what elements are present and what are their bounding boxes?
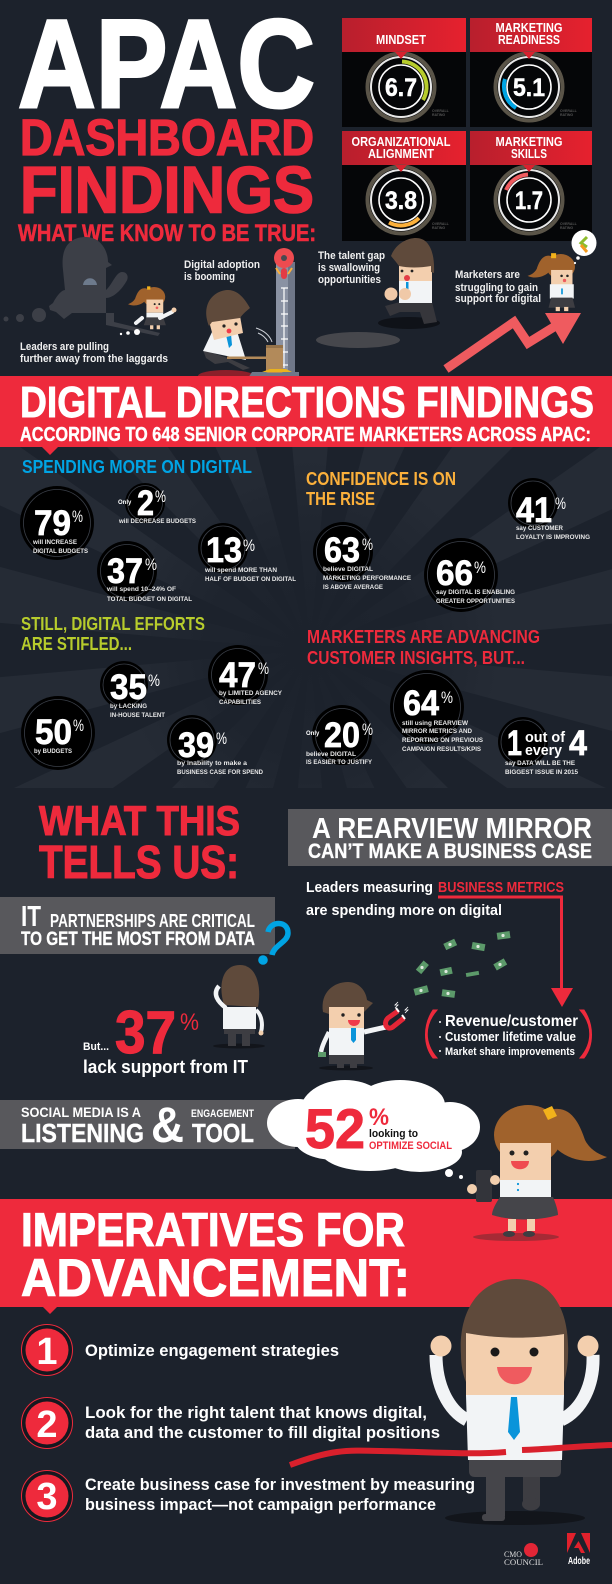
stat: only 2 percent: will DECREASE BUDGETS (118, 518, 196, 525)
panel: mindset gauge: RATING (432, 113, 445, 117)
heading: confidence on the rise: CONFIDENCE IS ON (306, 469, 456, 489)
heading: advancing customer insights (307, 627, 540, 668)
stat: 39 percent (167, 715, 263, 776)
panel: marketing readiness gauge: 5.1 (513, 74, 545, 102)
panel: marketing readiness gauge: OVERALL (560, 109, 578, 113)
list: business metric examples in brackets (426, 1010, 592, 1058)
heading: what this tells us: WHAT THIS (39, 797, 240, 844)
stat: 1 out of every 4: every (525, 742, 563, 759)
logo: CMO Council: CMO (504, 1550, 522, 1559)
heading: what this tells us: TELLS US: (39, 836, 239, 888)
banner: imperatives for advancement (0, 1199, 612, 1314)
panel: marketing readiness gauge: RATING (560, 113, 573, 117)
panel: IT partnerships: IT (21, 901, 41, 933)
stat: 63 percent: % (362, 535, 373, 554)
stat: 66 percent (424, 538, 515, 612)
list item 1: 1 (36, 1331, 58, 1373)
list item 1: Optimize engagement strategies (85, 1341, 339, 1360)
stat: 64 percent: still using REARVIEW (402, 720, 469, 727)
stat: 37 percent: % (145, 555, 157, 574)
panel: social media listening and engagement tool (0, 1097, 295, 1153)
stat: 47 percent (208, 645, 282, 706)
list item 1 (22, 1324, 339, 1376)
stat: 13 percent: 13 (206, 531, 242, 570)
heading: digital efforts stifled (21, 614, 205, 654)
stat: 37 percent lack support from IT: lack support from IT (83, 1057, 248, 1077)
stat: 50 percent: by BUDGETS (34, 748, 72, 755)
stat: 37 percent lack support from IT: % (180, 1009, 199, 1036)
list: business metric examples in brackets: Market share improvements (445, 1046, 575, 1058)
callout: cloud with 52 percent (267, 1080, 480, 1179)
stat: 64 percent: 64 (403, 684, 439, 723)
list item 2: Look for the right talent that knows digital, (85, 1403, 427, 1422)
illustration: shadow leader running (4, 237, 160, 336)
stat: only 2 percent: % (155, 487, 166, 506)
text: leaders measuring business metrics: Leaders measuring (306, 879, 433, 896)
stat: 64 percent: REPORTING ON PREVIOUS (402, 737, 483, 744)
callout: cloud with 52 percent: 52 (305, 1097, 365, 1160)
stat: 13 percent (198, 523, 296, 583)
stat: 63 percent: believe DIGITAL (323, 566, 373, 573)
stat: 37 percent lack support from IT (83, 999, 248, 1077)
stat: 35 percent: 35 (110, 668, 147, 707)
logo: Adobe (567, 1533, 590, 1567)
stat: 35 percent: IN-HOUSE TALENT (110, 712, 166, 719)
stat: 63 percent: 63 (324, 531, 360, 570)
stat: 41 percent (508, 478, 590, 541)
panel: organizational alignment gauge: RATING (432, 226, 445, 230)
stat: 13 percent: % (243, 536, 255, 555)
panel: rearview mirror heading (288, 809, 612, 866)
stat: 63 percent: MARKETING PERFORMANCE (323, 575, 411, 582)
icon: flying money (413, 931, 510, 998)
stat: 1 out of every 4: 4 (569, 724, 587, 763)
heading: confidence on the rise: THE RISE (306, 489, 375, 509)
title: APAC Dashboard Findings (18, 0, 316, 247)
list item 2 (22, 1398, 440, 1448)
panel: mindset gauge: MINDSET (376, 32, 426, 47)
stat: only 20 percent: IS EASIER TO JUSTIFY (306, 759, 372, 766)
heading: spending more on digital: SPENDING MORE ON DIGITAL (22, 457, 252, 477)
text: leaders pulling away (20, 341, 168, 365)
stat: 79 percent: % (72, 507, 83, 526)
list item 3 (22, 1470, 475, 1522)
arrow: metrics down to list (438, 897, 573, 1007)
list: business metric examples in brackets: Customer lifetime value (445, 1029, 576, 1044)
panel: organizational alignment gauge: ALIGNMENT (368, 146, 434, 161)
callout: cloud with 52 percent: OPTIMIZE SOCIAL (369, 1140, 452, 1152)
stat: 37 percent: 37 (107, 552, 143, 591)
list item 3: business impact—not campaign performance (85, 1495, 436, 1514)
banner: imperatives for advancement: IMPERATIVES FOR (21, 1203, 405, 1256)
stat: only 2 percent: Only (118, 500, 132, 506)
panel: organizational alignment gauge: ORGANIZATIONAL (352, 134, 451, 149)
panel: organizational alignment gauge: 3.8 (385, 187, 417, 215)
text: leaders pulling away: Leaders are pulling (20, 341, 109, 353)
text: marketers struggling: support for digital (455, 293, 541, 305)
stat: 79 percent: DIGITAL BUDGETS (33, 548, 88, 555)
panel: organizational alignment gauge (342, 131, 466, 241)
panel: mindset gauge: OVERALL (432, 109, 450, 113)
panel: marketing skills gauge: RATING (560, 226, 573, 230)
title: APAC Dashboard Findings: FINDINGS (20, 152, 314, 226)
panel: social media listening and engagement tool: TOOL (192, 1118, 254, 1148)
stat: 79 percent: will INCREASE (32, 539, 77, 546)
panel: organizational alignment gauge: OVERALL (432, 222, 450, 226)
illustration: man from behind scratching head (213, 965, 265, 1048)
stat: only 20 percent (306, 705, 373, 766)
illustration: woman with phone (467, 1105, 607, 1241)
list item 3: Create business case for investment by measuring (85, 1475, 475, 1494)
stat: 41 percent: 41 (516, 491, 552, 530)
stat: only 20 percent: Only (306, 731, 320, 737)
text: digital adoption booming (184, 259, 260, 283)
heading: what this tells us (39, 797, 240, 888)
stat: 1 out of every 4: say DATA WILL BE THE (505, 760, 575, 767)
stat: 64 percent: MIRROR METRICS AND (402, 728, 472, 735)
stat: 66 percent: GREATER OPPORTUNITIES (436, 598, 515, 605)
panel: marketing readiness gauge: MARKETING (496, 20, 562, 35)
stat: 13 percent: will spend MORE THAN (204, 567, 277, 574)
list item 3: 3 (36, 1476, 58, 1518)
text: talent gap: The talent gap (318, 250, 385, 262)
panel: marketing readiness gauge (470, 18, 592, 127)
stat: 39 percent: 39 (178, 726, 214, 765)
stat: 39 percent: % (216, 729, 227, 748)
text: leaders measuring business metrics: BUSINESS METRICS (438, 879, 564, 896)
stat: 63 percent: IS ABOVE AVERAGE (323, 584, 383, 591)
illustration: worried woman on arrow (528, 230, 596, 311)
stat: 47 percent: 47 (219, 656, 256, 695)
stat: 79 percent (20, 486, 94, 560)
stat: 64 percent: % (441, 688, 453, 707)
panel: social media listening and engagement tool: LISTENING (21, 1118, 144, 1148)
stat: only 20 percent: 20 (324, 716, 360, 755)
stat: 37 percent: TOTAL BUDGET ON DIGITAL (107, 596, 192, 603)
stat: 47 percent: % (258, 659, 269, 678)
stat: 1 out of every 4: 1 (507, 724, 522, 763)
stat: 64 percent (390, 670, 483, 753)
panel: IT partnerships: PARTNERSHIPS ARE CRITICAL (50, 911, 255, 931)
panel: social media listening and engagement tool: & (151, 1097, 184, 1153)
icon: rising arrow (446, 313, 581, 369)
stat: 41 percent: say CUSTOMER (516, 525, 563, 532)
text: leaders measuring business metrics (306, 879, 564, 919)
text: digital adoption booming: is booming (184, 271, 235, 283)
stat: 79 percent: 79 (34, 504, 71, 543)
logo: Adobe: Adobe (568, 1556, 590, 1567)
heading: advancing customer insights: MARKETERS ARE ADVANCING (307, 627, 540, 647)
text: marketers struggling: Marketers are (455, 269, 520, 281)
stat: only 2 percent: 2 (137, 484, 154, 523)
stat: 35 percent (100, 661, 166, 719)
stat: 63 percent (313, 522, 411, 591)
banner: imperatives for advancement: ADVANCEMENT: (21, 1249, 410, 1308)
panel: social media listening and engagement tool: SOCIAL MEDIA IS A (21, 1104, 141, 1120)
stat: 50 percent (21, 696, 95, 770)
stat: 1 out of every 4: out of (525, 729, 566, 746)
stat: 37 percent lack support from IT: 37 (115, 999, 176, 1066)
stat: 35 percent: % (148, 671, 160, 690)
list item 2: data and the customer to fill digital positions (85, 1423, 440, 1442)
list item 2: 2 (36, 1404, 58, 1446)
title: APAC Dashboard Findings: DASHBOARD (20, 109, 314, 166)
stat: 41 percent: % (555, 494, 566, 513)
illustration: man with magnet attracting money (318, 982, 408, 1070)
panel: marketing readiness gauge: READINESS (498, 32, 560, 47)
panel: social media listening and engagement tool: ENGAGEMENT (191, 1108, 254, 1120)
heading: digital efforts stifled: ARE STIFLED... (21, 634, 132, 654)
text: marketers struggling: struggling to gain (455, 282, 538, 294)
stat: only 20 percent: % (362, 720, 373, 739)
stat: 64 percent: CAMPAIGN RESULTS/KPIS (402, 746, 481, 753)
stat: 50 percent: % (73, 716, 84, 735)
illustration: high striker tower with bell (198, 248, 299, 382)
stat: only 20 percent: believe DIGITAL (306, 751, 356, 758)
panel: IT partnerships: TO GET THE MOST FROM DATA (21, 929, 255, 950)
stat: 66 percent: say DIGITAL IS ENABLING (436, 589, 515, 596)
stat: 1 out of every 4: BIGGEST ISSUE IN 2015 (505, 769, 578, 776)
logo: CMO Council (504, 1543, 543, 1567)
panel: mindset gauge (342, 18, 466, 127)
text: marketers struggling (455, 269, 541, 305)
illustration: small woman running ahead (120, 286, 176, 335)
heading: digital efforts stifled: STILL, DIGITAL EFFORTS (21, 614, 205, 634)
stat: 41 percent: LOYALTY IS IMPROVING (516, 534, 590, 541)
banner: digital directions findings (0, 376, 612, 455)
stat: 47 percent: by LIMITED AGENCY (219, 690, 282, 697)
stat: 66 percent: % (474, 558, 486, 577)
title: APAC Dashboard Findings: WHAT WE KNOW TO BE TRUE: (18, 220, 316, 247)
panel: marketing skills gauge: 1.7 (515, 187, 543, 215)
stat: only 2 percent (118, 483, 196, 525)
heading: advancing customer insights: CUSTOMER INSIGHTS, BUT... (307, 648, 525, 668)
illustration: cheering man at finish line (290, 1279, 612, 1525)
panel: mindset gauge: 6.7 (385, 74, 417, 102)
illustration: man swinging hammer (203, 290, 292, 373)
text: talent gap: opportunities (318, 274, 381, 286)
panel: marketing skills gauge: MARKETING (496, 134, 562, 149)
text: leaders measuring business metrics: are spending more on digital (306, 902, 502, 919)
text: leaders pulling away: further away from the laggards (20, 353, 168, 365)
stat: 39 percent: by inability to make a (177, 760, 247, 767)
stat: 47 percent: CAPABILITIES (219, 699, 261, 706)
stat: 37 percent lack support from IT: But... (83, 1041, 109, 1053)
stat: 13 percent: HALF OF BUDGET ON DIGITAL (205, 576, 296, 583)
panel: IT partnerships (0, 897, 275, 954)
stat: 37 percent: will spend 10–24% OF (106, 586, 176, 593)
callout: cloud with 52 percent: looking to (369, 1128, 418, 1140)
stat: 39 percent: BUSINESS CASE FOR SPEND (177, 769, 263, 776)
list: business metric examples in brackets: Revenue/customer (445, 1013, 578, 1030)
stat: 66 percent: 66 (436, 554, 473, 593)
callout: cloud with 52 percent: % (369, 1104, 389, 1131)
stat: 37 percent (97, 541, 192, 603)
stat: 50 percent: 50 (35, 713, 72, 752)
panel: marketing skills gauge (470, 131, 592, 241)
logo: CMO Council: COUNCIL (504, 1558, 543, 1567)
panel: marketing skills gauge: OVERALL (560, 222, 578, 226)
stat: 1 out of every 4 (498, 717, 587, 776)
heading: confidence on the rise (306, 469, 456, 509)
text: digital adoption booming: Digital adoption (184, 259, 260, 271)
stat: 35 percent: by LACKING (110, 703, 147, 710)
text: talent gap (318, 250, 385, 286)
icon: blue question mark (258, 924, 288, 965)
illustration: scared man near hole (316, 238, 440, 348)
panel: marketing skills gauge: SKILLS (511, 146, 547, 161)
text: talent gap: is swallowing (318, 262, 380, 274)
background rays (0, 447, 612, 1522)
